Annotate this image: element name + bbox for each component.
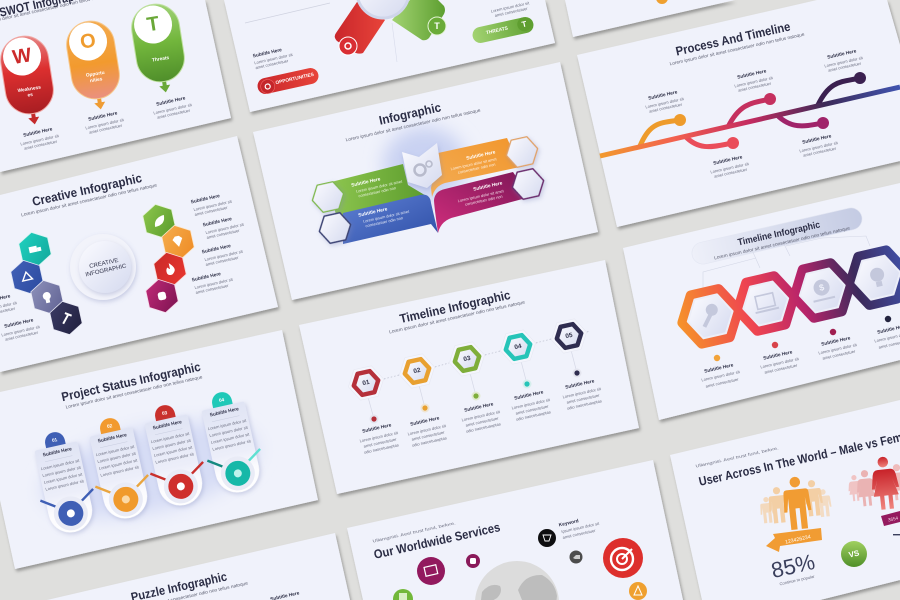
caption 2: amet consectetuer (764, 362, 798, 375)
caption right 2 (202, 214, 246, 240)
caption 01: Lorem ipsum dolor sit (359, 430, 399, 443)
caption 1: amet consectetuer (705, 376, 740, 389)
caption 4 (708, 153, 751, 179)
hexagon: navy (316, 211, 354, 245)
magenta banner (881, 511, 900, 526)
caption 3 (816, 334, 859, 361)
icon: green bubble (393, 589, 413, 600)
caption 03: odio nascetuaoptas (465, 421, 501, 434)
arrow banner: 123426234 (785, 534, 811, 546)
eyebrow text: Ullamgnisi. Aeel trust fund, before. (695, 445, 779, 469)
panel: creative infographic slide (0, 136, 278, 372)
icon: grey bubble (570, 550, 582, 564)
pill: threats (471, 15, 535, 45)
caption 3: Subtitle Here (156, 95, 186, 108)
card 04: Subtitle Here (209, 406, 240, 418)
caption 2: Subtitle Here (88, 110, 118, 123)
step 01: 01 (362, 379, 371, 387)
step 02 (396, 352, 438, 390)
subtitle: Lorem ipsum dolor sit amet consectetuer odio non tellus natoque (669, 32, 805, 66)
branching timeline (600, 78, 900, 156)
caption 03: Subtitle Here (464, 401, 494, 414)
text on orange ribbon: Subtitle Here (466, 149, 496, 162)
caption 2 (83, 109, 126, 135)
caption left 3 (0, 292, 19, 318)
center shield with gears (402, 143, 442, 188)
text on blue ribbon: Lorem ipsum dolor sit amet (363, 209, 410, 224)
caption 3: amet consectetuer (822, 348, 856, 361)
caption 5 (797, 132, 840, 158)
card 03: Lorem ipsum dolor sit (152, 438, 192, 451)
caption 3 (151, 94, 194, 120)
title: Creative Infographic (31, 171, 143, 209)
step 05: 05 (565, 332, 574, 340)
caption 3: amet consectetuer (157, 107, 191, 120)
percentage: 85% (769, 549, 817, 583)
caption 2: Lorem ipsum dolor sit (734, 75, 774, 89)
subtitle: Lorem ipsum dolor sit amet consectetuer odio non tellus natoque (65, 374, 203, 410)
caption 2 (758, 348, 801, 375)
hexagon: green leaf (141, 201, 177, 241)
card 02: Lorem ipsum dolor sit (98, 457, 139, 471)
caption 1: Lorem ipsum dolor sit (701, 369, 741, 383)
pill: O opportunities: O (79, 29, 97, 54)
caption 03: amet consectetuer (465, 415, 500, 428)
caption 1: Subtitle Here (23, 126, 53, 139)
eyebrow text: Ullamgnisi. Aeel trust fund, before. (372, 520, 456, 544)
hexagon: magenta fist (144, 276, 180, 316)
panel: process and timeline slide (577, 0, 900, 227)
hexagon: purple-grey (29, 277, 65, 317)
timeline nodes (674, 72, 866, 149)
panel: user across the world slide (670, 400, 900, 600)
caption 02: odio nascetuaoptas (411, 435, 447, 448)
caption 4: Subtitle Here (713, 154, 743, 167)
caption 4 (872, 322, 900, 350)
pill: O opportunities: nities (90, 76, 103, 84)
male figures (759, 475, 833, 531)
globe (475, 561, 559, 600)
caption 05: Lorem ipsum dolor sit (562, 386, 602, 399)
card 01: Lorem ipsum dolor sit (43, 471, 84, 485)
step 04 (497, 328, 539, 366)
card 01: Lorem ipsum dolor sit (42, 465, 82, 478)
pill: threats: T (521, 19, 528, 29)
caption 04: Subtitle Here (514, 389, 544, 402)
VS badge: VS (848, 548, 861, 560)
caption left 4: amet consectetuer (5, 329, 39, 342)
caption 01 (357, 421, 402, 455)
red segment (335, 2, 385, 54)
pill: T threats (128, 1, 190, 96)
hexagon: red flame (152, 249, 188, 289)
text on magenta ribbon (456, 180, 506, 208)
caption 5: amet consectetuer (803, 145, 837, 158)
icon: laptop bubble (417, 557, 445, 585)
caption 3: amet consectetuer (828, 60, 862, 73)
caption left 4: Subtitle Here (4, 317, 34, 330)
caption 3: Lorem ipsum dolor sit (818, 342, 858, 356)
caption 3: Lorem ipsum dolor sit (824, 55, 864, 69)
panel: partial top-right slide (565, 0, 735, 37)
card 01: Lorem ipsum dolor sit (45, 478, 85, 492)
hex 3 with coin (795, 266, 849, 315)
pill: W weaknesses (0, 33, 59, 128)
card 02: Lorem ipsum dolor sit (95, 444, 136, 457)
pill: W weaknesses: Weakness (17, 84, 42, 94)
subtitle: Lorem ipsum dolor sit amet consectetuer odio non tellus natoque (21, 182, 158, 217)
title: Project Status Infographic (60, 360, 202, 404)
badge: T: T (434, 21, 440, 31)
card 03: Lorem ipsum dolor sit (153, 444, 194, 458)
icon: target bubble (603, 538, 643, 578)
panel: infographic ribbons slide (253, 62, 598, 300)
caption 2 (732, 67, 775, 93)
female figures (847, 455, 900, 511)
caption right 2: Lorem ipsum dolor sit (205, 222, 245, 235)
panel: hexagon chain timeline slide (623, 183, 900, 420)
panel: SWOT circle slide (224, 0, 555, 112)
caption right 4 (191, 269, 235, 295)
caption 5: Lorem ipsum dolor sit (799, 140, 839, 154)
caption 04: odio nascetuaoptas (515, 409, 551, 422)
caption left 4: Lorem ipsum dolor sit (1, 324, 41, 338)
caption right 3: Lorem ipsum dolor sit (204, 249, 244, 262)
icon: small purple bubble (466, 554, 480, 568)
pill: W weaknesses: W (11, 44, 33, 69)
subtitle: Lorem ipsum dolor sit amet consectetuer odio non tellus natoque (389, 299, 526, 334)
icon: orange bubble (629, 582, 647, 600)
step 02: 02 (413, 367, 422, 375)
caption right 4: amet consectetuer (195, 283, 230, 295)
caption left (252, 45, 295, 70)
caption 1: Subtitle Here (648, 89, 678, 102)
caption left: Subtitle Here (252, 47, 283, 59)
card 02: Lorem ipsum dolor sit (100, 464, 140, 478)
caption 02: Lorem ipsum dolor sit (407, 423, 447, 436)
card 02: Lorem ipsum dolor sit (97, 451, 137, 464)
subtitle: Lorem ipsum dolor sit amet consectetuer odio non tellus natoque (714, 225, 851, 260)
caption 02: Subtitle Here (410, 415, 440, 428)
card 01: Subtitle Here (42, 446, 73, 458)
caption 01: odio nascetuaoptas (363, 442, 399, 455)
caption 5: Subtitle Here (802, 133, 832, 146)
step dots (370, 368, 582, 424)
caption 1 (643, 88, 686, 114)
card 03: Lorem ipsum dolor sit (155, 451, 195, 465)
title: Timeline Infographic (737, 220, 821, 248)
badge: O (339, 37, 357, 55)
header capsule (690, 206, 864, 266)
panel: worldwide services slide (347, 460, 683, 600)
pill: O opportunities: Opportu (85, 70, 105, 79)
step 01 (345, 364, 387, 402)
text on blue ribbon: Subtitle Here (358, 206, 388, 219)
card 04: 04 (218, 397, 225, 404)
caption 1: amet consectetuer (649, 101, 683, 114)
card 04: Lorem ipsum dolor sit (210, 431, 251, 445)
caption left: amet consectetuer (255, 58, 289, 70)
center circle (70, 234, 136, 300)
ribbon: blue (343, 195, 438, 244)
text on magenta ribbon: consectetuer odio non (465, 194, 503, 207)
title: Infographic (378, 100, 442, 128)
keyword text (558, 514, 602, 540)
pill: T threats: T (145, 13, 161, 36)
card 01: Lorem ipsum dolor sit (40, 458, 81, 471)
keyword text: Keyword (558, 518, 579, 528)
percentage note: Continue to popular (779, 574, 816, 586)
card 03: Lorem ipsum dolor sit (150, 431, 191, 444)
hex 3 with coin: $ (818, 282, 825, 293)
female percentage mark (893, 534, 900, 535)
card 04: Lorem ipsum dolor sit (207, 418, 248, 431)
pill: T threats: Threats (152, 55, 170, 64)
arrow banner (766, 528, 822, 552)
caption right 1: amet consectetuer (194, 205, 229, 217)
ribbon: orange (431, 138, 520, 197)
caption 04: amet consectetuer (515, 403, 550, 416)
dotted connectors (368, 331, 590, 419)
hex 2 with laptop (739, 279, 793, 328)
pill: O opportunities (63, 18, 125, 113)
caption 02: amet consectetuer (411, 429, 446, 442)
caption 2: Subtitle Here (737, 68, 767, 81)
subtitle: Lorem ipsum dolor sit amet consectetuer odio non tellus natoque (345, 108, 481, 142)
caption 05: Subtitle Here (565, 378, 595, 391)
keyword text: amet consectetuer (562, 528, 597, 540)
caption 3: Lorem ipsum dolor sit (153, 102, 193, 116)
caption 3: Subtitle Here (821, 335, 851, 348)
keyword text: Ipsum ipsum dolor sit (561, 521, 600, 534)
caption 01: amet consectetuer (363, 436, 398, 449)
card 03: Subtitle Here (152, 419, 183, 431)
card 02: 02 (106, 423, 113, 430)
caption right 1: Subtitle Here (190, 193, 221, 205)
caption left 4 (0, 316, 42, 342)
icon: black cart bubble (538, 529, 556, 547)
hexagon: magenta (509, 167, 547, 201)
hexagon: navy (48, 298, 84, 338)
hexagon: orange diamond (160, 222, 196, 262)
text on orange ribbon (449, 149, 499, 176)
caption right 1: Lorem ipsum dolor sit (193, 199, 233, 212)
card 02 (82, 412, 156, 524)
caption 3 (822, 47, 865, 73)
chain dots (714, 316, 891, 361)
text on blue ribbon (358, 202, 411, 229)
caption 1: Subtitle Here (704, 362, 734, 375)
title: Timeline Infographic (398, 288, 512, 326)
magenta banner: 3654 (887, 515, 899, 523)
card 01 (27, 426, 101, 538)
card 02: Subtitle Here (97, 432, 128, 444)
caption 2: Lorem ipsum dolor sit (760, 356, 800, 370)
text on magenta ribbon: Lorem ipsum dolor sit amet (457, 188, 505, 203)
caption left: Lorem ipsum dolor sit (254, 52, 294, 65)
text on green ribbon: Subtitle Here (351, 176, 381, 189)
step 05 (548, 317, 590, 355)
caption right 3: Subtitle Here (201, 243, 232, 255)
center circle: CREATIVE (89, 258, 119, 270)
card 03 (137, 399, 211, 511)
center circle: INFOGRAPHIC (85, 263, 128, 278)
caption right 3: amet consectetuer (205, 255, 240, 267)
ribbon: green (327, 164, 428, 218)
caption 4: Lorem ipsum dolor sit (710, 161, 750, 175)
ribbon: magenta (434, 172, 530, 233)
step 03 (446, 340, 488, 378)
caption right 2: Subtitle Here (202, 216, 233, 228)
step 03: 03 (463, 355, 472, 363)
caption 04 (509, 388, 554, 422)
card 04 (194, 386, 268, 498)
step 04: 04 (514, 343, 523, 351)
pill: opportunities: OPPORTUNITIES (275, 72, 315, 86)
caption 05: odio nascetuaoptas (566, 398, 602, 411)
pill: opportunities (256, 66, 320, 96)
pill: threats: THREATS (486, 25, 509, 36)
card 04: Lorem ipsum dolor sit (209, 425, 249, 438)
caption 2: amet consectetuer (89, 122, 123, 135)
green segment (392, 0, 445, 40)
card 03: 03 (161, 410, 168, 417)
VS badge (841, 541, 867, 567)
panel: SWOT infographic slide (0, 0, 231, 172)
text on green ribbon (351, 172, 404, 199)
caption 04: Lorem ipsum dolor sit (511, 397, 551, 410)
caption right 4: Subtitle Here (191, 271, 222, 283)
caption 02 (405, 414, 450, 448)
caption right 3 (201, 241, 245, 267)
hex 1 with key (683, 292, 737, 341)
text on orange ribbon: consectetuer odio non (457, 162, 496, 175)
hexagon: green (309, 180, 347, 214)
caption 01: Subtitle Here (362, 422, 392, 435)
caption 03: Lorem ipsum dolor sit (461, 409, 501, 422)
caption right (490, 0, 532, 19)
caption right: amet consectetuer (494, 6, 529, 18)
caption right: Lorem ipsum dolor sit (490, 0, 530, 14)
card 01: 01 (51, 437, 58, 444)
caption 1 (699, 361, 743, 389)
caption 1: Lorem ipsum dolor sit (20, 133, 60, 147)
text on green ribbon: Lorem ipsum dolor sit amet (356, 179, 403, 194)
caption right 2: amet consectetuer (206, 228, 241, 240)
hexagon: orange (503, 135, 541, 169)
caption right 4: Lorem ipsum dolor sit (194, 277, 234, 290)
title: Process And Timeline (674, 19, 792, 58)
caption 1 (18, 125, 61, 151)
text on blue ribbon: consectetuer odio non (365, 215, 403, 228)
caption right 1 (190, 191, 234, 217)
hex 4 with bulb (851, 253, 900, 302)
text on magenta ribbon: Subtitle Here (473, 180, 503, 193)
caption 2: amet consectetuer (738, 80, 772, 93)
hexagon: blue recycle (9, 257, 45, 297)
card 04: Lorem ipsum dolor sit (212, 438, 252, 452)
hexagon chain (677, 248, 900, 346)
text on green ribbon: consectetuer odio non (358, 185, 396, 198)
caption 2: Lorem ipsum dolor sit (85, 117, 125, 131)
panel: project status slide (0, 330, 318, 569)
text on orange ribbon: Lorem ipsum dolor sit amet (450, 156, 498, 171)
pill: W weaknesses: es (27, 93, 34, 99)
panel: puzzle infographic slide (47, 533, 350, 600)
hexagon: teal truck (17, 229, 53, 269)
title: Our Worldwide Services (373, 520, 502, 562)
caption 1: amet consectetuer (24, 138, 58, 151)
caption 03 (459, 400, 504, 434)
caption 3: Subtitle Here (827, 48, 857, 61)
center disc (357, 0, 409, 18)
caption 2: Subtitle Here (763, 349, 793, 362)
caption 05: amet consectetuer (566, 392, 601, 405)
badge: T (428, 17, 446, 35)
panel: timeline infographic slide (299, 260, 639, 494)
capsule connector lines (703, 236, 870, 290)
caption 4: amet consectetuer (714, 166, 748, 179)
caption 1: Lorem ipsum dolor sit (645, 96, 685, 110)
caption 05 (560, 377, 605, 411)
